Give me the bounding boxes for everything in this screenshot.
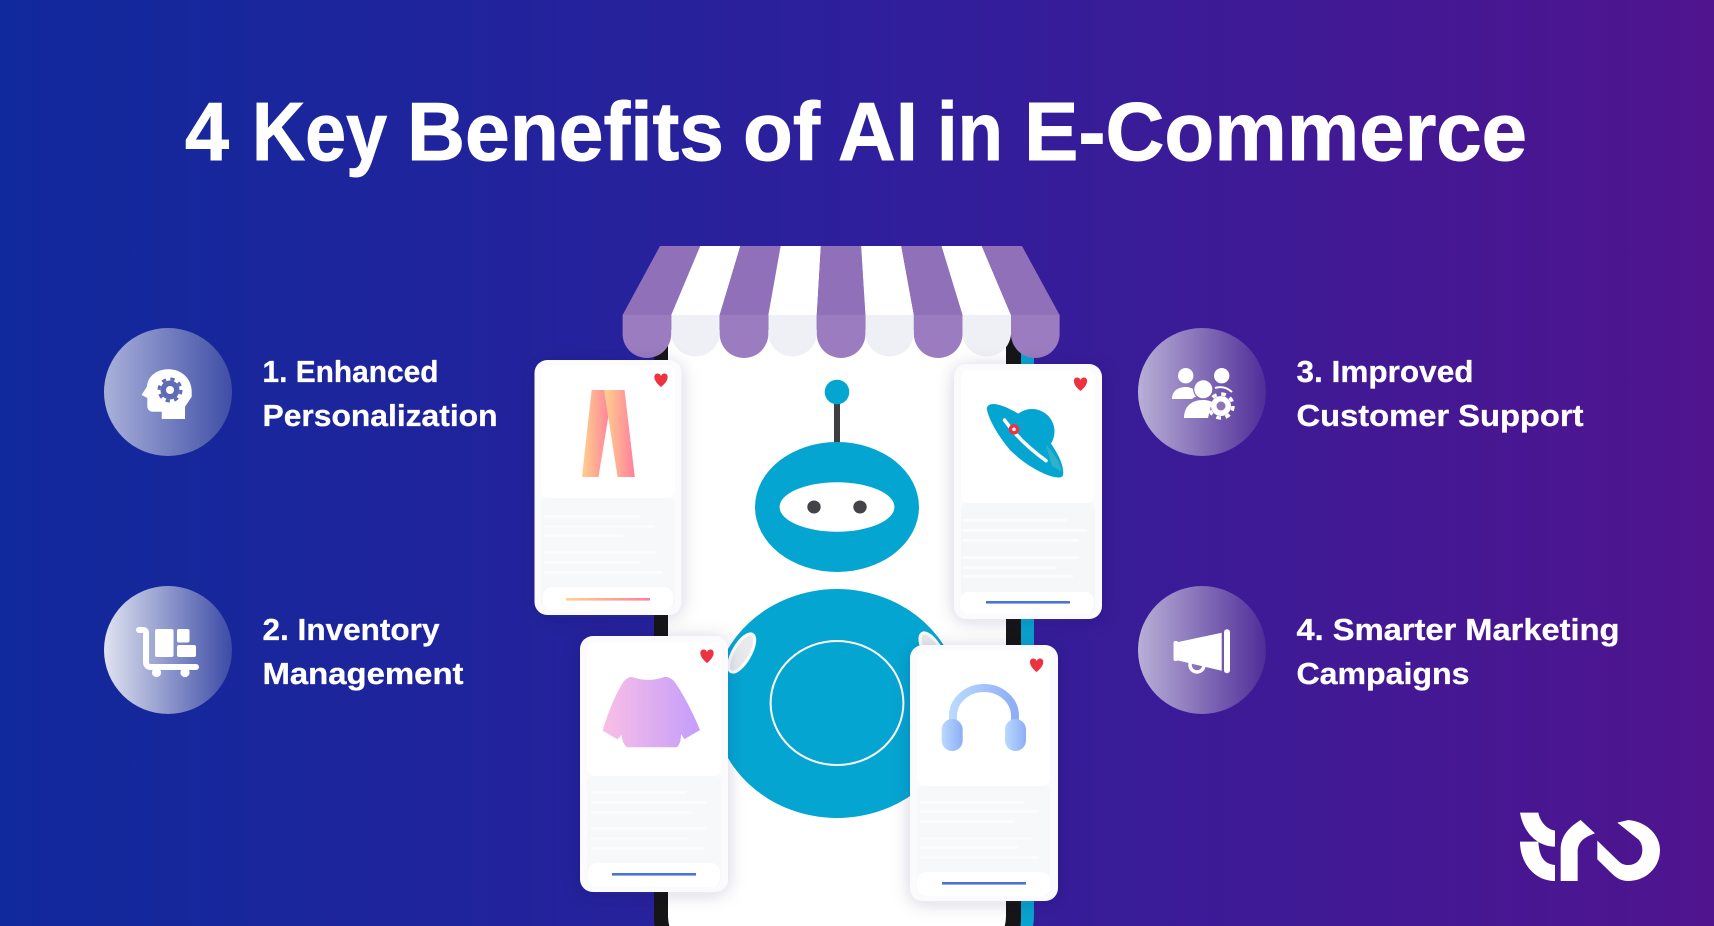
icon: customer group with gear <box>1138 328 1266 456</box>
benefit 1: enhanced personalization <box>104 328 498 456</box>
icon: heart <box>1030 658 1043 672</box>
title: AI <box>838 85 918 178</box>
label: 4. Smarter Marketing Campaigns <box>1296 612 1620 691</box>
product card: hat <box>954 364 1102 619</box>
title: 4 <box>185 85 229 178</box>
title: Key <box>252 85 387 178</box>
product card: sweater <box>580 636 728 892</box>
label: 4. Smarter Marketing Campaigns: 4. Smarter Marketing <box>1296 612 1620 647</box>
icon: heart <box>1074 378 1087 391</box>
striped awning <box>623 246 1060 358</box>
product card: headphones <box>910 645 1058 901</box>
title: Benefits <box>407 85 724 178</box>
label: 3. Improved Customer Support: 3. Improved <box>1296 354 1474 389</box>
logo <box>1520 813 1660 881</box>
storefront illustration <box>623 246 1060 926</box>
label: 3. Improved Customer Support: Customer Support <box>1296 398 1584 433</box>
icon: sweater <box>603 677 700 747</box>
product card: trousers <box>534 360 682 615</box>
icon: hat <box>987 404 1063 477</box>
label: 1. Enhanced Personalization <box>262 354 498 433</box>
icon: headphones <box>942 688 1026 751</box>
title: E-Commerce <box>1024 85 1527 178</box>
icon: heart <box>700 650 714 663</box>
label: 2. Inventory Management: Management <box>262 656 464 691</box>
benefit 3: improved customer support <box>1138 328 1584 456</box>
icon: megaphone <box>1138 586 1266 714</box>
label: 2. Inventory Management: 2. Inventory <box>262 612 440 647</box>
label: 1. Enhanced Personalization: Personalization <box>262 398 498 433</box>
icon: head with gear <box>104 328 232 456</box>
robot <box>713 380 961 818</box>
label: 4. Smarter Marketing Campaigns: Campaigns <box>1296 656 1470 691</box>
icon: inventory cart <box>104 586 232 714</box>
label: 2. Inventory Management <box>262 612 464 691</box>
icon: heart <box>654 374 668 387</box>
title: in <box>937 85 1003 178</box>
benefit 4: smarter marketing campaigns <box>1138 586 1620 714</box>
label: 1. Enhanced Personalization: 1. Enhanced <box>262 354 438 389</box>
phone body behind the shop <box>654 330 1034 926</box>
label: 3. Improved Customer Support <box>1296 354 1584 433</box>
title: of <box>743 85 820 178</box>
icon: trousers <box>582 390 635 477</box>
benefit 2: inventory management <box>104 586 464 714</box>
